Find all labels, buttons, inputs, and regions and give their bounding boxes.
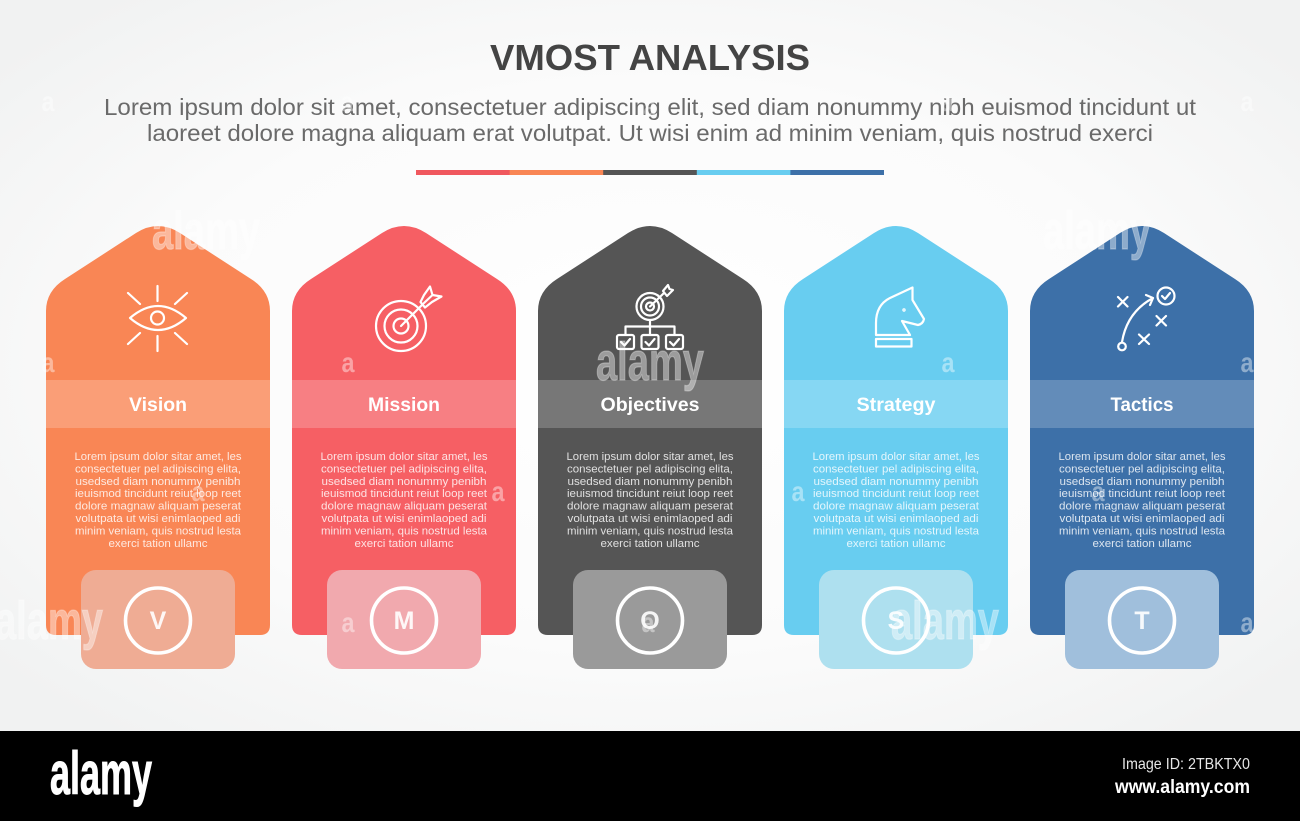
icon: target over checklist tree bbox=[617, 285, 683, 349]
subtitle: Lorem ipsum dolor sit amet, consectetuer adipiscing elit, sed diam nonummy nibh euismod tincidunt ut bbox=[104, 94, 1197, 120]
body text: Lorem ipsum dolor sitar amet, les bbox=[1058, 451, 1226, 463]
label band bbox=[1030, 380, 1254, 428]
body text: consectetuer pel adipiscing elita, bbox=[1059, 463, 1225, 475]
body text: dolore magnaw aliquam peserat bbox=[321, 501, 488, 513]
watermark overlay: a bbox=[1240, 86, 1254, 117]
subtitle bbox=[104, 94, 1197, 146]
heading: Objectives bbox=[600, 394, 700, 416]
panel: mission bbox=[292, 226, 516, 669]
watermark overlay: a bbox=[792, 476, 805, 507]
letter chip: T bbox=[1134, 607, 1150, 635]
panel: objectives bbox=[538, 226, 762, 669]
card shape bbox=[784, 226, 1008, 635]
body text: consectetuer pel adipiscing elita, bbox=[567, 463, 733, 475]
letter chip: V bbox=[150, 607, 167, 635]
body text: ieuismod tincidunt reiut loop reet bbox=[75, 488, 242, 500]
body text: exerci tation ullamc bbox=[354, 538, 454, 550]
body text: volutpata ut wisi enimlaoped adi bbox=[814, 513, 978, 525]
body text bbox=[566, 451, 734, 550]
watermark overlay: a bbox=[342, 347, 355, 378]
title: VMOST ANALYSIS bbox=[490, 37, 810, 78]
label band bbox=[292, 380, 516, 428]
letter chip: M bbox=[394, 607, 414, 635]
letter chip bbox=[819, 570, 973, 669]
body text: consectetuer pel adipiscing elita, bbox=[813, 463, 979, 475]
label band bbox=[46, 380, 270, 428]
icon: chess knight bbox=[876, 288, 924, 346]
label band bbox=[538, 380, 762, 428]
body text bbox=[74, 451, 242, 550]
body text: usedsed diam nonummy penibh bbox=[1060, 476, 1224, 488]
icon: eye bbox=[128, 286, 187, 351]
heading: Mission bbox=[368, 394, 440, 416]
body text: ieuismod tincidunt reiut loop reet bbox=[1059, 488, 1226, 500]
heading: Vision bbox=[129, 394, 187, 416]
watermark overlay: a bbox=[642, 607, 655, 638]
watermark overlay: alamy bbox=[152, 201, 260, 261]
label band bbox=[784, 380, 1008, 428]
body text: ieuismod tincidunt reiut loop reet bbox=[567, 488, 734, 500]
watermark overlay: a bbox=[1092, 476, 1105, 507]
card shape bbox=[538, 226, 762, 635]
body text: consectetuer pel adipiscing elita, bbox=[75, 463, 241, 475]
letter chip bbox=[327, 570, 481, 669]
letter chip bbox=[573, 570, 727, 669]
watermark overlay: alamy bbox=[596, 332, 704, 392]
body text: exerci tation ullamc bbox=[1092, 538, 1192, 550]
watermark overlay: a bbox=[42, 86, 55, 117]
watermark overlay bbox=[0, 86, 1254, 651]
card shape bbox=[292, 226, 516, 635]
watermark overlay: a bbox=[942, 347, 955, 378]
watermark overlay: a bbox=[644, 91, 657, 122]
image id: Image ID: 2TBKTX0 bbox=[1122, 756, 1250, 773]
watermark overlay: a bbox=[340, 86, 354, 117]
icon: play diagram bbox=[1118, 288, 1174, 350]
colour divider bar bbox=[416, 170, 884, 175]
body text: minim veniam, quis nostrud lesta bbox=[813, 525, 980, 537]
body text: minim veniam, quis nostrud lesta bbox=[1059, 525, 1226, 537]
body text: dolore magnaw aliquam peserat bbox=[75, 501, 242, 513]
body text bbox=[320, 451, 488, 550]
body text: ieuismod tincidunt reiut loop reet bbox=[321, 488, 488, 500]
watermark overlay: a bbox=[1240, 607, 1254, 638]
watermark overlay: a bbox=[42, 347, 55, 378]
watermark overlay: alamy bbox=[1043, 201, 1151, 261]
watermark overlay: a bbox=[492, 476, 505, 507]
body text: ieuismod tincidunt reiut loop reet bbox=[813, 488, 980, 500]
watermark overlay: alamy bbox=[891, 591, 999, 651]
panel: vision bbox=[46, 226, 270, 669]
footer logo: alamy bbox=[50, 740, 152, 807]
body text: usedsed diam nonummy penibh bbox=[322, 476, 486, 488]
body text: volutpata ut wisi enimlaoped adi bbox=[568, 513, 732, 525]
watermark overlay: a bbox=[192, 476, 205, 507]
body text: minim veniam, quis nostrud lesta bbox=[567, 525, 734, 537]
letter chip: S bbox=[888, 607, 904, 635]
body text bbox=[1058, 451, 1226, 550]
body text: Lorem ipsum dolor sitar amet, les bbox=[812, 451, 980, 463]
body text: Lorem ipsum dolor sitar amet, les bbox=[320, 451, 488, 463]
card shape bbox=[46, 226, 270, 635]
website: www.alamy.com bbox=[1114, 777, 1250, 798]
body text: Lorem ipsum dolor sitar amet, les bbox=[74, 451, 242, 463]
subtitle: laoreet dolore magna aliquam erat volutpat. Ut wisi enim ad minim veniam, quis nostrud exerci bbox=[147, 120, 1153, 146]
body text: exerci tation ullamc bbox=[108, 538, 208, 550]
icon: target with arrow bbox=[376, 286, 442, 351]
body text: Lorem ipsum dolor sitar amet, les bbox=[566, 451, 734, 463]
body text: volutpata ut wisi enimlaoped adi bbox=[1060, 513, 1224, 525]
body text: dolore magnaw aliquam peserat bbox=[1059, 501, 1226, 513]
letter chip: O bbox=[640, 607, 660, 635]
panel: strategy bbox=[784, 226, 1008, 669]
watermark overlay: a bbox=[940, 86, 954, 117]
body text: minim veniam, quis nostrud lesta bbox=[321, 525, 488, 537]
letter chip bbox=[1065, 570, 1219, 669]
body text: dolore magnaw aliquam peserat bbox=[567, 501, 734, 513]
body text: usedsed diam nonummy penibh bbox=[814, 476, 978, 488]
heading: Strategy bbox=[856, 394, 936, 416]
body text: minim veniam, quis nostrud lesta bbox=[75, 525, 242, 537]
body text: exerci tation ullamc bbox=[600, 538, 700, 550]
body text bbox=[812, 451, 980, 550]
body text: exerci tation ullamc bbox=[846, 538, 946, 550]
body text: consectetuer pel adipiscing elita, bbox=[321, 463, 487, 475]
body text: usedsed diam nonummy penibh bbox=[568, 476, 732, 488]
letter chip bbox=[81, 570, 235, 669]
heading: Tactics bbox=[1110, 394, 1174, 416]
body text: dolore magnaw aliquam peserat bbox=[813, 501, 980, 513]
body text: volutpata ut wisi enimlaoped adi bbox=[322, 513, 486, 525]
watermark overlay: a bbox=[1240, 347, 1254, 378]
footer bar bbox=[0, 731, 1300, 821]
panel: tactics bbox=[1030, 226, 1254, 669]
body text: usedsed diam nonummy penibh bbox=[76, 476, 240, 488]
watermark overlay: a bbox=[342, 607, 355, 638]
card shape bbox=[1030, 226, 1254, 635]
body text: volutpata ut wisi enimlaoped adi bbox=[76, 513, 240, 525]
